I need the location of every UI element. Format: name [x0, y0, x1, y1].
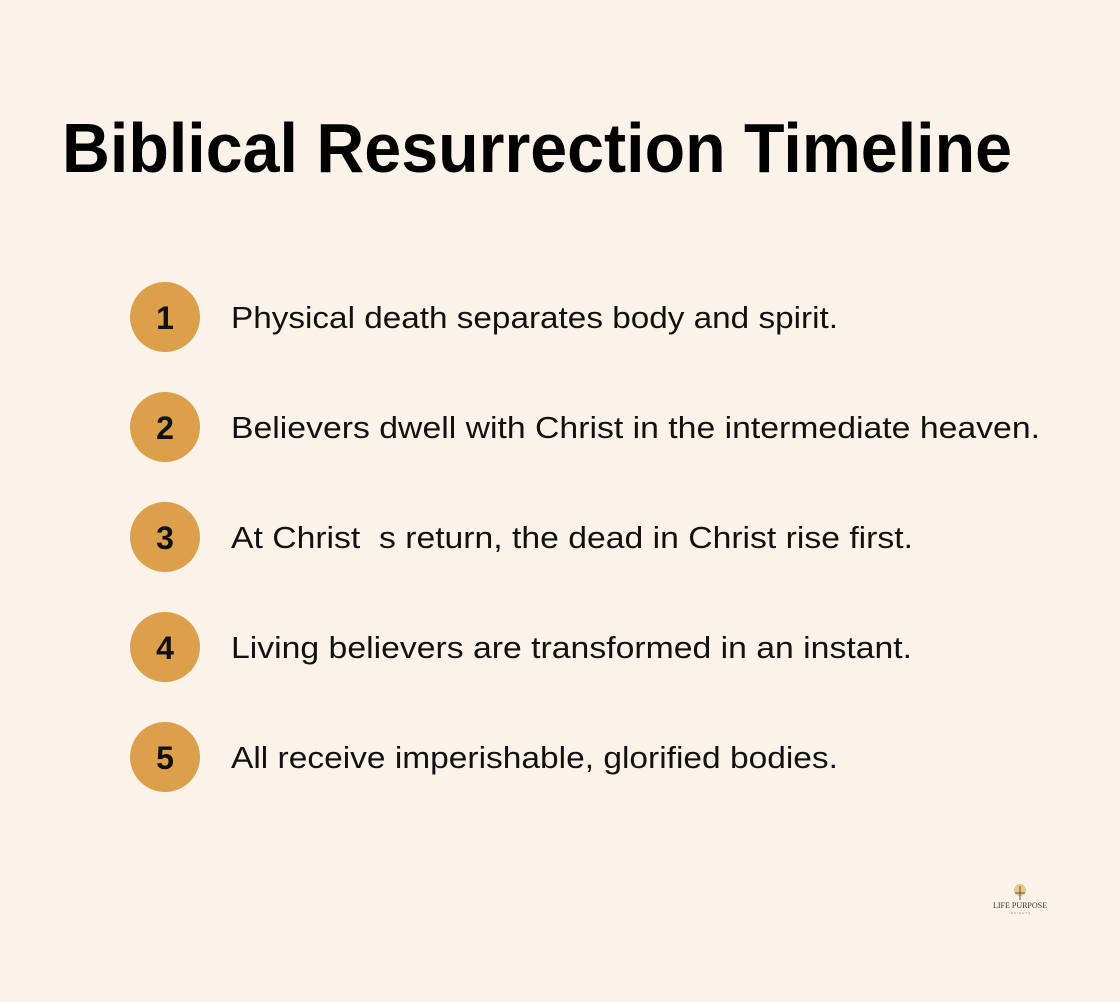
step 1: [130, 282, 838, 352]
step 2: [130, 392, 1040, 462]
logo: INSIGHTS: [1009, 911, 1031, 915]
step 5: [130, 722, 838, 792]
step 1: 1: [156, 300, 174, 336]
logo: LIFE PURPOSE: [993, 901, 1047, 910]
step 1: Physical death separates body and spirit.: [231, 300, 838, 335]
title: Biblical Resurrection Timeline: [62, 109, 1012, 187]
step 5: 5: [156, 740, 174, 776]
step 4: 4: [156, 630, 174, 666]
step 4: [130, 612, 912, 682]
logo: [993, 884, 1047, 915]
step 2: 2: [156, 410, 174, 446]
step 5: All receive imperishable, glorified bodies.: [231, 740, 838, 775]
step 3: 3: [156, 520, 174, 556]
step 3: [130, 502, 913, 572]
step 2: Believers dwell with Christ in the intermediate heaven.: [231, 410, 1040, 445]
step 3: At Christ s return, the dead in Christ rise first.: [231, 520, 913, 555]
step 4: Living believers are transformed in an instant.: [231, 630, 912, 665]
